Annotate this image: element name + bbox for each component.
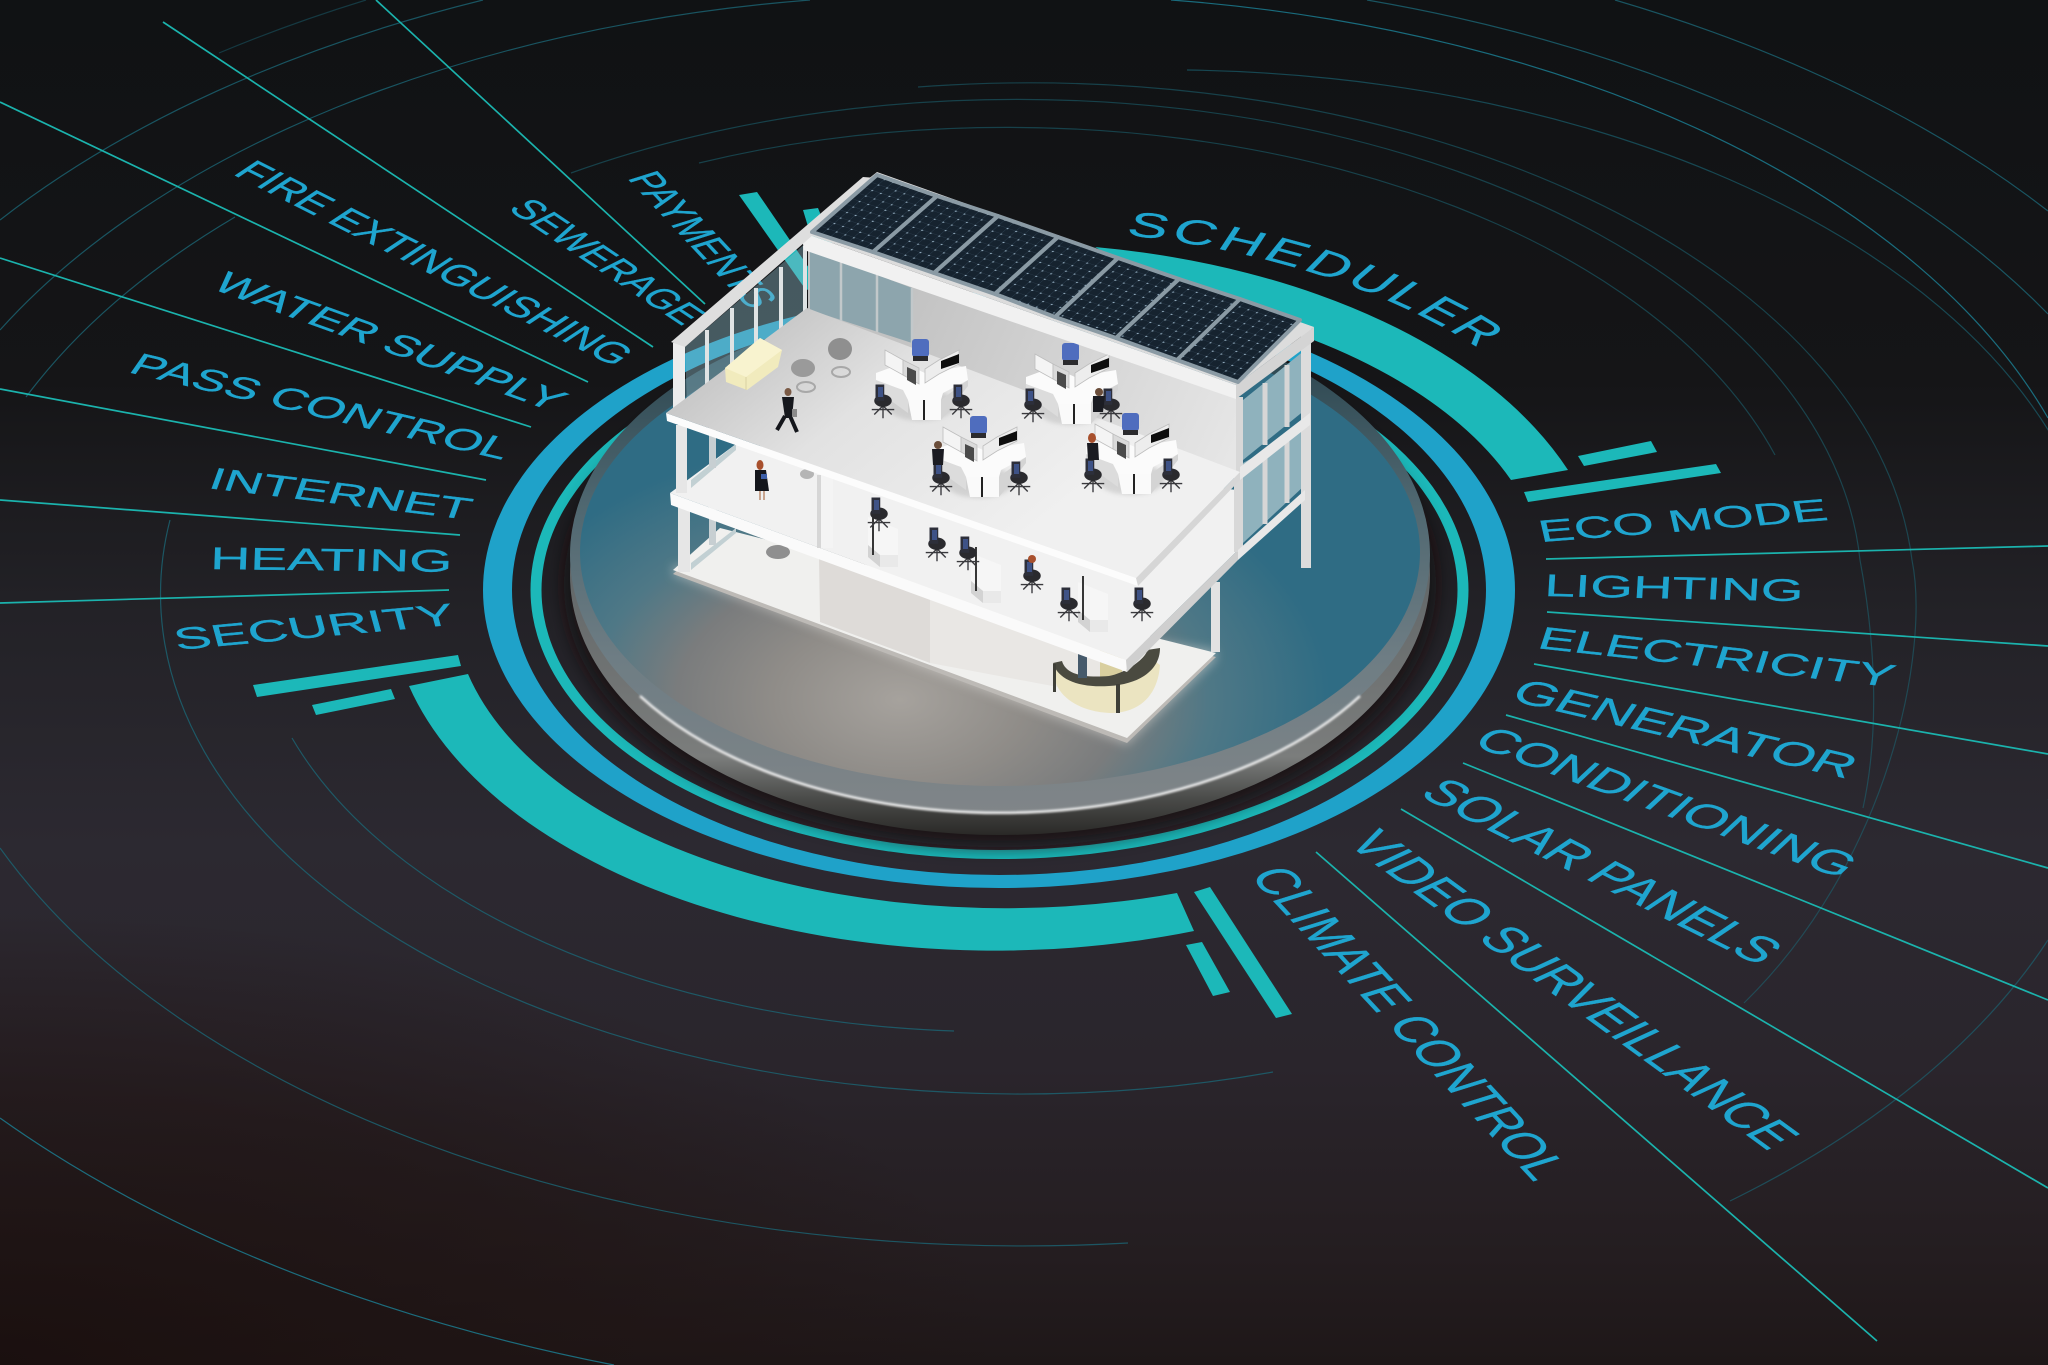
label: ELECTRICITY: ELECTRICITY — [1534, 621, 1900, 694]
man figure — [777, 388, 797, 432]
lounge chairs — [791, 338, 852, 392]
woman figure — [755, 460, 769, 500]
upper floor back wall — [808, 245, 1236, 472]
label: PASS CONTROL: PASS CONTROL — [122, 348, 519, 467]
ring: inner thin teal — [530, 321, 1468, 859]
lower floor desks and chairs — [868, 498, 1153, 632]
desk cluster 1 — [872, 339, 972, 421]
building — [666, 172, 1314, 745]
label: ECO MODE: ECO MODE — [1535, 493, 1831, 549]
label: CLIMATE CONTROL: CLIMATE CONTROL — [1237, 861, 1581, 1186]
label: SEWERAGE: SEWERAGE — [499, 193, 714, 331]
label: SOLAR PANELS: SOLAR PANELS — [1409, 770, 1795, 971]
label: SECURITY: SECURITY — [170, 598, 458, 657]
desk cluster 2 — [1022, 343, 1122, 425]
label: GENERATOR: GENERATOR — [1504, 672, 1866, 786]
label: WATER SUPPLY: WATER SUPPLY — [204, 266, 576, 417]
ring: blue — [483, 292, 1515, 888]
label: SCHEDULER: SCHEDULER — [1130, 212, 1500, 347]
ground floor — [673, 505, 1220, 745]
label: FIRE EXTINGUISHING: FIRE EXTINGUISHING — [225, 154, 644, 372]
right side glazing — [1234, 328, 1311, 568]
label: CONDITIONING: CONDITIONING — [1464, 720, 1868, 885]
label: PAYMENTS: PAYMENTS — [617, 166, 787, 313]
label: VIDEO SURVEILLANCE: VIDEO SURVEILLANCE — [1335, 823, 1813, 1156]
reception desk — [1053, 648, 1160, 713]
label: LIGHTING: LIGHTING — [1544, 568, 1805, 608]
sofa — [725, 338, 782, 390]
desk cluster 4 — [1082, 413, 1182, 495]
label: HEATING: HEATING — [210, 541, 453, 579]
mid slab — [670, 425, 1238, 672]
label: INTERNET: INTERNET — [204, 462, 477, 526]
ring: outer thick teal arcs — [409, 247, 1568, 951]
upper floor surface — [666, 308, 1240, 586]
tick marks — [253, 192, 1721, 1018]
seated workers — [932, 388, 1105, 465]
platform disc — [564, 297, 1436, 847]
gable glass wall — [679, 242, 807, 413]
roof beam — [671, 172, 1314, 399]
desk cluster 3 — [930, 416, 1030, 498]
solar panels — [812, 175, 1300, 382]
